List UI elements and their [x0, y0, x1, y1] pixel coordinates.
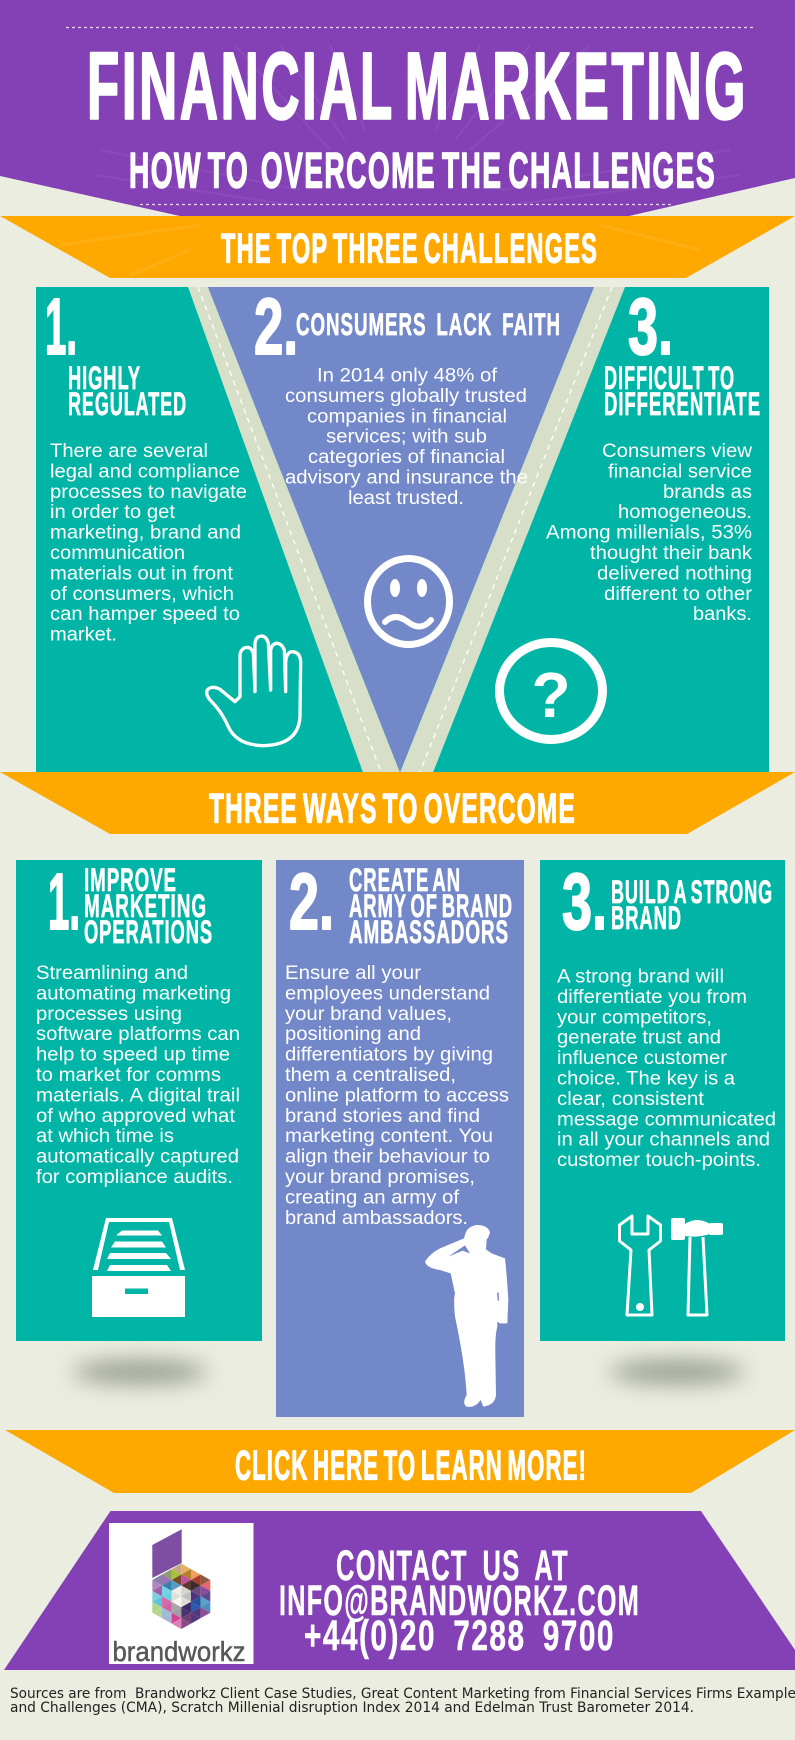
icon: question mark: ? [531, 659, 571, 731]
body text: Ensure all your [285, 963, 422, 984]
heading: highly regulated: HIGHLY [68, 360, 141, 396]
body text: online platform to access [285, 1085, 509, 1106]
body text: influence customer [557, 1048, 728, 1069]
heading [611, 874, 773, 936]
heading: ARMY OF BRAND [349, 888, 513, 924]
contact panel [4, 1511, 795, 1670]
body text 2: categories of financial [308, 447, 505, 468]
body text: in all your channels and [557, 1130, 770, 1151]
body text: your brand promises, [285, 1167, 475, 1188]
body text 1: of consumers, which [50, 584, 234, 605]
body text 2: services; with sub [326, 427, 487, 448]
body text 3: banks. [693, 604, 752, 625]
strip: left divider [188, 287, 400, 772]
body text: your competitors, [557, 1007, 712, 1028]
body text 1: processes to navigate [50, 482, 247, 503]
heading [84, 862, 213, 950]
challenge 1 [45, 282, 301, 746]
card 3: build a strong brand [540, 857, 785, 1341]
body text 3: different to other [604, 584, 753, 605]
heading: highly regulated: REGULATED [68, 386, 187, 422]
icon: question mark [500, 642, 602, 740]
icon: filing drawer [92, 1218, 185, 1317]
body text: help to speed up time [36, 1045, 230, 1066]
heading: highly regulated [68, 360, 187, 422]
body text: materials. A digital trail [36, 1085, 240, 1106]
heading: MARKETING [84, 888, 207, 924]
challenge 1: 1. [45, 282, 77, 371]
body text 3: brands as [663, 482, 752, 503]
card 1: improve marketing operations: 1. [48, 857, 80, 946]
body text: differentiate you from [557, 987, 747, 1008]
body text 3: delivered nothing [597, 563, 752, 584]
body text: brand ambassadors. [285, 1208, 468, 1229]
body text: marketing content. You [285, 1126, 493, 1147]
body text 2: least trusted. [348, 488, 464, 509]
body text: message communicated [557, 1109, 776, 1130]
contact text [279, 1542, 640, 1660]
banner: click here to learn more [5, 1430, 795, 1493]
body text: automating marketing [36, 983, 231, 1004]
heading [349, 862, 513, 950]
body text 2: In 2014 only 48% of [317, 366, 498, 386]
body text 1: legal and compliance [50, 461, 240, 482]
body text: automatically captured [36, 1147, 239, 1168]
body text: differentiators by giving [285, 1045, 493, 1066]
heading: IMPROVE [84, 862, 177, 898]
card shadow left [72, 1360, 208, 1384]
body text 3: thought their bank [590, 543, 753, 564]
sources: and Challenges (CMA), Scratch Millenial disruption Index 2014 and Edelman Trust Barometer 2014. [10, 1700, 694, 1716]
body text 3: financial service [608, 461, 752, 482]
body text 1: market. [50, 625, 117, 646]
contact text: +44(0)20 7288 9700 [304, 1612, 615, 1660]
body text: A strong brand will [557, 966, 724, 988]
body text: software platforms can [36, 1024, 240, 1045]
body text: creating an army of [285, 1187, 460, 1208]
heading: consumers lack faith: CONSUMERS LACK FAITH [296, 306, 561, 342]
body text: customer touch-points. [557, 1150, 761, 1171]
body text [36, 963, 240, 1188]
body text: choice. The key is a [557, 1068, 735, 1090]
icon: wrench [620, 1216, 660, 1315]
body text: to market for comms [36, 1065, 221, 1086]
icon: sad face [368, 558, 450, 644]
body text: align their behaviour to [285, 1147, 490, 1168]
body text: generate trust and [557, 1028, 721, 1049]
logo wordmark: brandworkz [112, 1636, 246, 1667]
number 3: 3. [628, 282, 673, 371]
card shadow right [609, 1360, 745, 1384]
body text: employees understand [285, 983, 490, 1004]
body text 1: materials out in front [50, 563, 234, 584]
body text 2: advisory and insurance the [285, 468, 528, 488]
body text 3: Among millenials, 53% [546, 523, 752, 544]
body text: of who approved what [36, 1106, 236, 1127]
body text: processes using [36, 1004, 182, 1025]
dotted rule top [66, 26, 754, 28]
icon: saluting soldier [425, 1225, 508, 1407]
icon: hand [207, 636, 301, 746]
icon: hammer [671, 1218, 723, 1315]
panel: consumers triangle [208, 287, 594, 772]
card 2: army of brand ambassadors [276, 857, 524, 1417]
body text: Streamlining and [36, 963, 188, 984]
heading: BRAND [611, 900, 682, 936]
body text: positioning and [285, 1024, 421, 1045]
body text: clear, consistent [557, 1089, 705, 1110]
challenge 3 [500, 282, 761, 740]
body text: them a centralised, [285, 1065, 456, 1086]
body text 2 [285, 366, 528, 509]
body text 1: marketing, brand and [50, 523, 241, 544]
body text 3: homogeneous. [618, 502, 752, 523]
body text 1: can hamper speed to [50, 604, 240, 625]
body text 2: companies in financial [307, 406, 507, 427]
card 1: improve marketing operations [16, 857, 262, 1341]
strip: right divider [400, 287, 625, 772]
banner: three ways to overcome [0, 772, 795, 834]
sources [10, 1686, 795, 1716]
contact text: CONTACT US AT [336, 1542, 569, 1590]
dotted rule bottom [140, 204, 674, 206]
body text 1: communication [50, 543, 185, 564]
heading: CREATE AN [349, 862, 461, 898]
body text [285, 963, 509, 1229]
body text: at which time is [36, 1126, 174, 1147]
banner: the top three challenges [0, 216, 795, 278]
number 2: 2. [254, 282, 298, 371]
body text 3 [546, 441, 753, 625]
body text 2: consumers globally trusted [285, 386, 527, 407]
body text 1: There are several [50, 441, 208, 462]
body text 3: Consumers view [602, 441, 752, 462]
heading: AMBASSADORS [349, 914, 509, 950]
number 3: 3. [562, 857, 607, 946]
number 2: 2. [289, 857, 334, 946]
heading: difficult to differentiate [604, 360, 761, 422]
body text [557, 966, 776, 1171]
body text 1: in order to get [50, 502, 176, 523]
panel: top three challenges [36, 282, 769, 772]
heading: OPERATIONS [84, 914, 213, 950]
logo: brandworkz [109, 1523, 254, 1667]
challenge 2 [254, 282, 561, 644]
body text: brand stories and find [285, 1106, 480, 1127]
header band [0, 0, 795, 216]
body text: for compliance audits. [36, 1167, 233, 1188]
body text: your brand values, [285, 1004, 452, 1025]
body text 1 [50, 441, 247, 646]
